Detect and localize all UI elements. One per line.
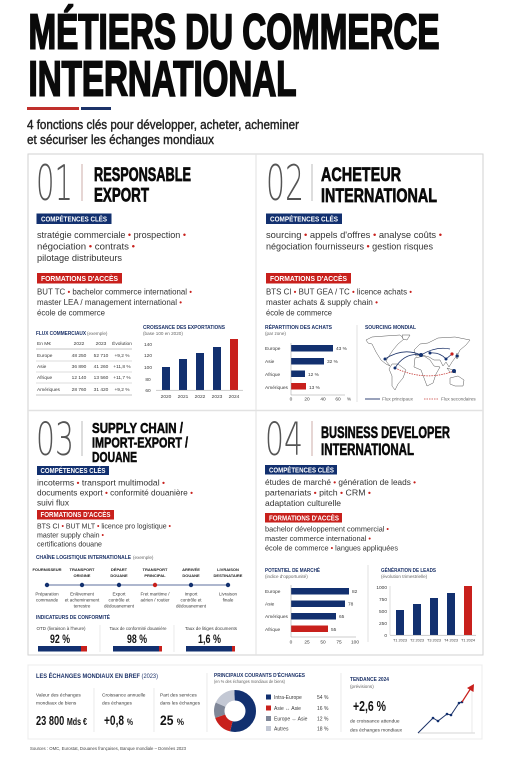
skills text: adaptation culturelle — [265, 498, 341, 508]
training text — [266, 288, 412, 318]
chain step descriptions: dédouanement — [176, 604, 207, 608]
bar chart: génération de leads: 750 — [379, 597, 387, 603]
trend 2024: +2,6 % — [353, 699, 386, 715]
bar chart: potentiel de marché: 0 — [290, 640, 293, 646]
bar chart: génération de leads: 250 — [379, 621, 387, 627]
training text: école de commerce • langues appliquées — [265, 544, 398, 552]
skills text — [37, 230, 186, 263]
chain step descriptions: Export — [112, 592, 126, 596]
donut legend: Asie ↔ Asie — [274, 706, 301, 712]
bar chart: génération de leads: 500 — [379, 609, 387, 615]
badge compétences: COMPÉTENCES CLÉS — [40, 466, 106, 475]
table: flux commerciaux: 2023 — [96, 341, 107, 347]
bar chart: génération de leads: T1 2023 — [393, 638, 407, 642]
chain step descriptions: Enlèvement — [70, 592, 95, 596]
bar chart: génération de leads: GÉNÉRATION DE LEADS — [381, 566, 436, 574]
chain step headers: DOUANE — [182, 573, 200, 578]
bar chart: génération de leads: 1000 — [376, 585, 387, 591]
bar chart: génération de leads — [376, 566, 476, 642]
table: flux commerciaux: +9,2 % — [114, 387, 130, 393]
donut chart: principaux courants: PRINCIPAUX COURANTS D'ÉCHANGES — [214, 671, 305, 679]
donut legend: 12 % — [317, 716, 329, 722]
logistics chain diagram: CHAÎNE LOGISTIQUE INTERNATIONALE — [36, 553, 132, 561]
stat: services: 25 % — [160, 712, 184, 728]
skills text: incoterms • transport multimodal • — [37, 478, 165, 488]
heading: EXPORT — [94, 184, 149, 206]
number 02: 02 — [266, 155, 304, 212]
logistics chain diagram: (exemple) — [133, 555, 154, 560]
chain step headers: ARRIVÉE — [182, 567, 200, 572]
donut legend — [266, 694, 329, 732]
chain step headers: DÉPART — [111, 567, 128, 572]
stat: services — [160, 692, 201, 728]
badge formations: FORMATIONS D'ACCÈS — [41, 274, 118, 283]
chain step headers: PRINCIPAL — [144, 573, 166, 578]
heading divider — [81, 164, 83, 201]
stat: services: Part des services — [160, 692, 197, 698]
indicator: conformité — [110, 626, 167, 652]
bar chart: répartition des achats: % — [347, 396, 352, 402]
table: flux commerciaux: 28 760 — [72, 387, 87, 393]
stat: services: dans les échanges — [160, 700, 201, 706]
map legend: Flux principaux — [382, 396, 414, 402]
training text: BTS CI • BUT GEA / TC • licence achats • — [266, 288, 412, 296]
bar chart: génération de leads: 0 — [384, 633, 387, 639]
bar chart: croissance des exportations: 120 — [144, 353, 152, 359]
number 03: 03 — [36, 413, 74, 466]
panel heading: LES ÉCHANGES MONDIAUX EN BREF (2023) — [36, 672, 158, 680]
compliance indicators — [36, 613, 238, 652]
logistics chain diagram — [32, 553, 243, 608]
training text: BUT TC • bachelor commerce international • — [37, 288, 192, 296]
trend 2024 — [350, 677, 475, 734]
skills text: suivi flux — [37, 498, 70, 508]
chain step headers: DOUANE — [110, 573, 128, 578]
table: flux commerciaux: (exemple) — [87, 331, 108, 336]
donut chart: principaux courants: (en % des échanges mondiaux de biens) — [214, 679, 285, 684]
donut chart: principaux courants — [214, 671, 329, 732]
training text: master LEA / management international • — [37, 298, 182, 307]
training text: master supply chain • — [37, 530, 104, 540]
heading: INTERNATIONAL — [321, 185, 437, 207]
bar chart: répartition des achats: 13 % — [309, 385, 321, 391]
bar chart: répartition des achats — [265, 323, 352, 402]
bar chart: croissance des exportations: 60 — [145, 388, 151, 394]
title: INTERNATIONAL — [28, 52, 296, 106]
bar chart: génération de leads: T4 2023 — [444, 638, 458, 642]
heading: INTERNATIONAL — [321, 440, 414, 459]
donut legend: Intra-Europe — [274, 695, 302, 701]
heading: RESPONSABLE — [94, 164, 191, 186]
bar chart: potentiel de marché: POTENTIEL DE MARCHÉ — [265, 566, 320, 574]
panel: échanges mondiaux en bref — [28, 665, 482, 739]
table: flux commerciaux: FLUX COMMERCIAUX — [36, 331, 86, 337]
donut legend: Europe ↔ Asie — [274, 716, 308, 722]
chain step descriptions: contrôle et — [108, 598, 130, 602]
stat: croissance — [102, 692, 146, 728]
bar chart: potentiel de marché: Asie — [265, 602, 275, 608]
chain step headers: TRANSPORT — [143, 567, 168, 572]
trend 2024: de croissance attendue — [350, 718, 400, 724]
stat: valeur — [36, 692, 87, 728]
bar chart: potentiel de marché: 78 — [348, 602, 354, 608]
bar chart: croissance des exportations: 2020 — [161, 394, 172, 400]
heading — [92, 420, 189, 466]
chain step descriptions: dédouanement — [104, 604, 135, 608]
bar chart: croissance des exportations: 2022 — [195, 394, 206, 400]
subtitle: 4 fonctions clés pour développer, acheter, acheminer — [27, 117, 300, 132]
stat: valeur: 23 800 Mds € — [36, 713, 87, 728]
chain line and nodes — [45, 583, 230, 587]
chain step headers: LIVRAISON — [217, 567, 239, 572]
training text: école de commerce — [266, 308, 333, 318]
trend line chart — [418, 684, 475, 733]
table: flux commerciaux: 13 560 — [94, 375, 109, 381]
skills text: sourcing • appels d'offres • analyse coûts • — [266, 230, 442, 240]
table: flux commerciaux: 48 250 — [72, 353, 87, 359]
chain step descriptions — [35, 592, 237, 608]
table: flux commerciaux — [36, 331, 132, 395]
skills text: partenariats • pitch • CRM • — [265, 488, 371, 498]
donut legend: 18 % — [317, 726, 329, 732]
heading — [321, 423, 450, 459]
training text — [265, 524, 398, 552]
bar chart: croissance des exportations — [143, 325, 243, 400]
training text: certifications douane — [37, 540, 102, 548]
bar chart: répartition des achats: Asie — [265, 359, 275, 365]
chain step headers: DESTINATAIRE — [214, 573, 243, 578]
bar chart: potentiel de marché: (indice d'opportunité) — [265, 574, 308, 579]
bar chart: croissance des exportations: CROISSANCE DES EXPORTATIONS — [143, 325, 225, 331]
chain step descriptions: Fret maritime / — [140, 592, 170, 596]
table: flux commerciaux: +9,2 % — [114, 353, 130, 359]
indicator: conformité: Taux de conformité douanière — [110, 626, 167, 632]
heading: SUPPLY CHAIN / — [92, 420, 184, 437]
bar chart: potentiel de marché: Amériques — [265, 614, 289, 620]
bar chart: croissance des exportations: 140 — [144, 342, 152, 348]
panel divider — [356, 325, 358, 402]
bar chart: répartition des achats: 60 — [335, 396, 341, 402]
panel: responsable export — [36, 155, 243, 400]
skills text: pilotage distributeurs — [37, 253, 122, 263]
indicator: OTD — [36, 626, 87, 652]
chain step headers — [32, 567, 243, 578]
bar chart: croissance des exportations: 2023 — [212, 394, 223, 400]
bar chart: répartition des achats: 43 % — [336, 346, 348, 352]
skills text: négociation • contrats • — [37, 242, 135, 252]
bar chart: potentiel de marché: Europe — [265, 589, 281, 595]
badge formations: FORMATIONS D'ACCÈS — [270, 274, 347, 283]
heading divider — [81, 421, 83, 456]
heading — [94, 164, 191, 206]
table: flux commerciaux: 41 260 — [94, 364, 109, 370]
trade routes — [385, 348, 454, 376]
world map: sourcing mondial — [365, 325, 476, 402]
chain step descriptions: Livraison — [219, 592, 237, 596]
sources: Sources : OMC, Eurostat, Douanes françaises, Banque mondiale – Données 2023 — [30, 746, 186, 751]
bar chart: croissance des exportations: (base 100 en 2020) — [143, 331, 183, 336]
training text: master commerce international • — [265, 534, 371, 543]
table: flux commerciaux: Amériques — [37, 387, 61, 393]
bar chart: répartition des achats: (par zone) — [265, 331, 286, 336]
subtitle — [27, 117, 300, 147]
indicator: litiges: 1,6 % — [198, 634, 221, 646]
training text: BTS CI • BUT MLT • licence pro logistique • — [37, 522, 171, 530]
bar chart: répartition des achats: Europe — [265, 346, 281, 352]
map nodes — [384, 352, 458, 373]
indicator: litiges — [185, 626, 238, 652]
donut legend: Autres — [274, 726, 289, 732]
bar chart: potentiel de marché: 75 — [336, 640, 342, 646]
badge formations: FORMATIONS D'ACCÈS — [269, 514, 339, 522]
heading — [321, 164, 437, 207]
title — [28, 4, 440, 106]
stat: valeur: Valeur des échanges — [36, 692, 81, 698]
badge formations: FORMATIONS D'ACCÈS — [40, 510, 111, 519]
badge compétences: COMPÉTENCES CLÉS — [269, 466, 334, 474]
world map: sourcing mondial: SOURCING MONDIAL — [365, 325, 417, 331]
skills text: stratégie commerciale • prospection • — [37, 230, 186, 240]
map continents — [366, 335, 470, 390]
bar chart: répartition des achats: Amériques — [265, 385, 289, 391]
chain step descriptions: aérien / routier — [140, 598, 170, 602]
bar chart: croissance des exportations: 2024 — [229, 394, 240, 400]
bar chart: génération de leads: (évolution trimestrielle) — [381, 574, 428, 579]
table: flux commerciaux: En M€ — [37, 341, 51, 347]
table: flux commerciaux: 36 890 — [72, 364, 87, 370]
heading: IMPORT-EXPORT / — [92, 434, 189, 452]
skills text — [265, 477, 416, 508]
indicator: OTD: 92 % — [50, 634, 70, 646]
bar chart: répartition des achats: 0 — [290, 396, 293, 402]
table: flux commerciaux: Asie — [37, 364, 47, 370]
training text: école de commerce — [37, 308, 106, 318]
chain step headers: TRANSPORT — [70, 567, 95, 572]
chain step descriptions: terrestre — [74, 604, 91, 608]
map legend — [365, 396, 476, 402]
bar chart: croissance des exportations: 2021 — [178, 394, 189, 400]
heading: DOUANE — [92, 449, 137, 466]
stat: valeur: mondiaux de biens — [36, 700, 77, 706]
bar chart: répartition des achats: 32 % — [327, 359, 339, 365]
bar chart: répartition des achats: 12 % — [308, 372, 320, 378]
chain step headers: ORIGINE — [74, 573, 91, 578]
chain step descriptions: commande — [36, 598, 59, 602]
number 01: 01 — [36, 155, 73, 212]
training text — [37, 522, 171, 548]
bar chart: potentiel de marché: 100 — [351, 640, 359, 646]
bar chart: potentiel de marché: 50 — [320, 640, 326, 646]
heading: ACHETEUR — [321, 164, 401, 186]
compliance indicators: INDICATEURS DE CONFORMITÉ — [36, 613, 110, 621]
bar chart: potentiel de marché: Afrique — [265, 627, 281, 633]
skills text: documents export • conformité douanière • — [37, 488, 193, 498]
panel: acheteur international — [265, 155, 476, 402]
trend 2024: (prévisions) — [350, 684, 374, 689]
bar chart: répartition des achats: Afrique — [265, 372, 281, 378]
panel: supply chain — [32, 413, 243, 652]
bar chart: répartition des achats: 40 — [320, 396, 326, 402]
table: flux commerciaux: 2022 — [74, 341, 85, 347]
panel: business developer — [265, 413, 476, 646]
trend 2024: TENDANCE 2024 — [350, 677, 389, 683]
table: flux commerciaux: +11,8 % — [113, 364, 131, 370]
table: flux commerciaux: Europe — [37, 353, 53, 359]
bar chart: croissance des exportations: 80 — [145, 377, 151, 383]
badge compétences: COMPÉTENCES CLÉS — [270, 214, 338, 224]
indicator: litiges: Taux de litiges documents — [185, 626, 238, 632]
heading divider — [311, 164, 313, 201]
bar chart: répartition des achats: RÉPARTITION DES ACHATS — [265, 323, 333, 331]
table: flux commerciaux: +11,7 % — [113, 375, 131, 381]
chain step descriptions: contrôle et — [180, 598, 202, 602]
skills text: études de marché • génération de leads • — [265, 477, 416, 487]
subtitle: et sécuriser les échanges mondiaux — [27, 132, 214, 147]
donut legend: 16 % — [317, 706, 329, 712]
chain step descriptions: Préparation — [35, 592, 59, 596]
table: flux commerciaux: Afrique — [37, 375, 53, 381]
donut legend: 54 % — [317, 695, 329, 701]
badge compétences: COMPÉTENCES CLÉS — [41, 214, 107, 224]
table: flux commerciaux: 12 140 — [72, 375, 87, 381]
map legend: Flux secondaires — [441, 396, 476, 402]
heading divider — [311, 421, 313, 456]
bar chart: potentiel de marché: 55 — [331, 627, 337, 633]
bar chart: génération de leads: T2 2023 — [410, 638, 424, 642]
table: flux commerciaux: Évolution — [112, 340, 132, 347]
bar chart: potentiel de marché: 65 — [339, 614, 345, 620]
number 04: 04 — [265, 413, 303, 466]
stat: croissance: +0,8 % — [104, 712, 133, 728]
training text: bachelor développement commercial • — [265, 524, 389, 534]
indicator: OTD: OTD (livraison à l'heure) — [36, 626, 86, 632]
table: flux commerciaux: 52 710 — [94, 353, 109, 359]
bar chart: potentiel de marché: 82 — [352, 589, 358, 595]
bar chart: génération de leads: T3 2023 — [427, 638, 441, 642]
bar chart: potentiel de marché: 25 — [304, 640, 310, 646]
skills text — [37, 478, 193, 508]
bar chart: répartition des achats: 20 — [304, 396, 310, 402]
indicator: conformité: 98 % — [127, 634, 147, 646]
title rule — [27, 107, 111, 110]
bar chart: génération de leads: T1 2024 — [461, 638, 475, 642]
panel divider — [367, 565, 369, 642]
main panel frame — [28, 154, 483, 655]
chain step descriptions: Import — [185, 592, 198, 596]
training text: master achats & supply chain • — [266, 298, 378, 307]
chain step descriptions: finale — [223, 598, 234, 602]
bar chart: croissance des exportations: 100 — [144, 365, 152, 371]
trend 2024: des échanges mondiaux — [350, 728, 403, 734]
skills text: négociation fournisseurs • gestion risques — [266, 242, 433, 252]
chain step descriptions: et acheminement — [65, 598, 100, 602]
chain step headers: FOURNISSEUR — [32, 567, 62, 572]
skills text — [266, 230, 442, 252]
table: flux commerciaux: 31 420 — [94, 387, 109, 393]
training text — [37, 288, 192, 318]
stat: croissance: des échanges — [102, 700, 132, 706]
bar chart: potentiel de marché — [265, 566, 359, 646]
stat: croissance: Croissance annuelle — [102, 692, 146, 698]
